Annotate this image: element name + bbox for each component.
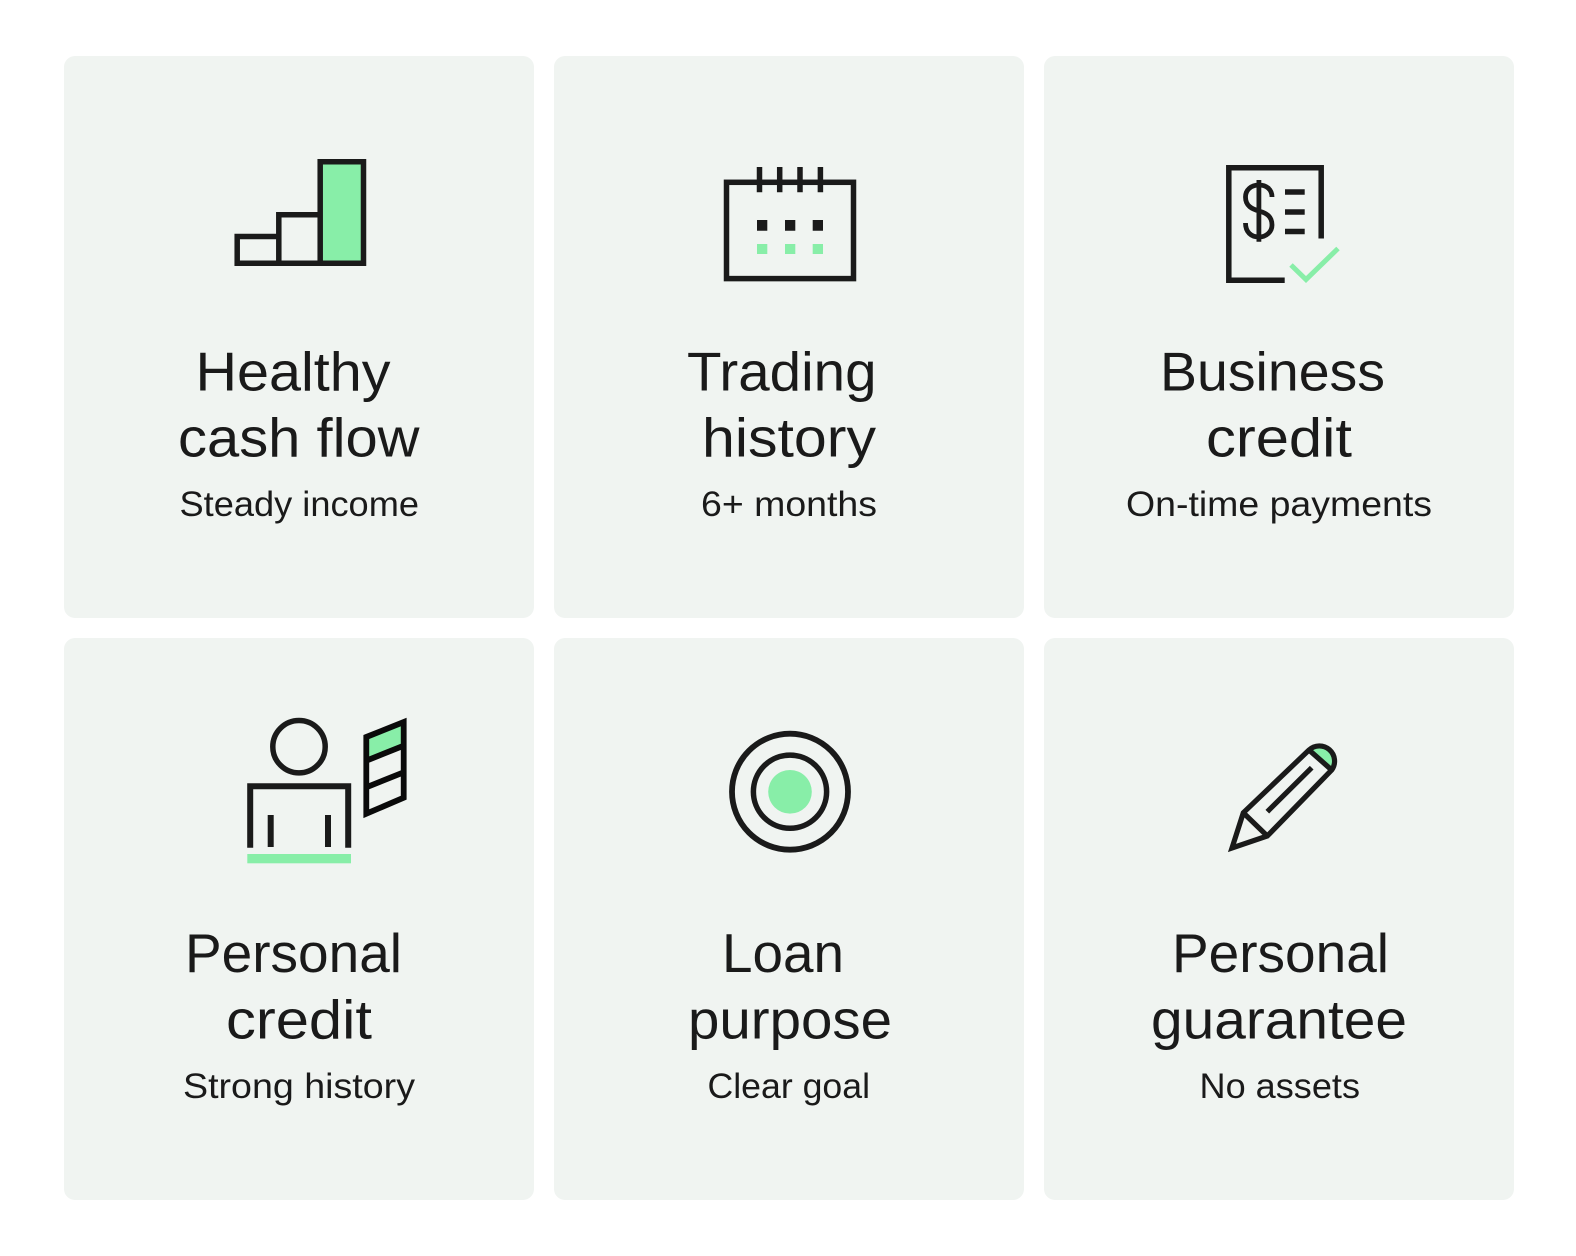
subtext: strong history: Strong history: [183, 1067, 416, 1106]
heading: personal credit: Personal: [185, 922, 402, 984]
heading: trading history: [687, 340, 877, 468]
icon: rising bars: [237, 162, 364, 263]
heading: healthy cash flow: Healthy: [196, 340, 391, 402]
subtext: steady income: Steady income: [180, 485, 419, 524]
heading: healthy cash flow: cash flow: [178, 406, 420, 468]
panel: personal guarantee: [1044, 638, 1514, 1200]
icon: calendar: [726, 167, 854, 279]
heading: personal guarantee: guarantee: [1151, 988, 1407, 1050]
icon: pencil: [1232, 746, 1335, 848]
panel: trading history: [554, 56, 1024, 618]
heading: healthy cash flow: [178, 340, 420, 468]
subtext: clear goal: Clear goal: [708, 1067, 870, 1106]
heading: business credit: [1160, 340, 1385, 468]
subtext: no assets: No assets: [1200, 1067, 1360, 1106]
heading: personal guarantee: Personal: [1172, 922, 1389, 984]
heading: trading history: Trading: [687, 340, 876, 402]
panel: personal credit: [64, 638, 534, 1200]
heading: loan purpose: [688, 922, 892, 1050]
heading: personal credit: [185, 922, 402, 1050]
subtext: on-time payments: On-time payments: [1126, 485, 1432, 524]
heading: business credit: Business: [1160, 340, 1385, 402]
heading: loan purpose: Loan: [722, 922, 844, 984]
panel: loan purpose: [554, 638, 1024, 1200]
panel: healthy cash flow: [64, 56, 534, 618]
panel: business credit: [1044, 56, 1514, 618]
heading: personal guarantee: [1151, 922, 1407, 1050]
heading: business credit: credit: [1206, 406, 1352, 468]
subtext: 6+ months: 6+ months: [701, 485, 877, 524]
icon: invoice with check mark: [1229, 168, 1338, 280]
heading: personal credit: credit: [226, 988, 372, 1050]
icon: target: [732, 734, 848, 850]
heading: trading history: history: [702, 406, 877, 468]
icon: person with score chart: [247, 720, 404, 863]
heading: loan purpose: purpose: [688, 988, 892, 1050]
